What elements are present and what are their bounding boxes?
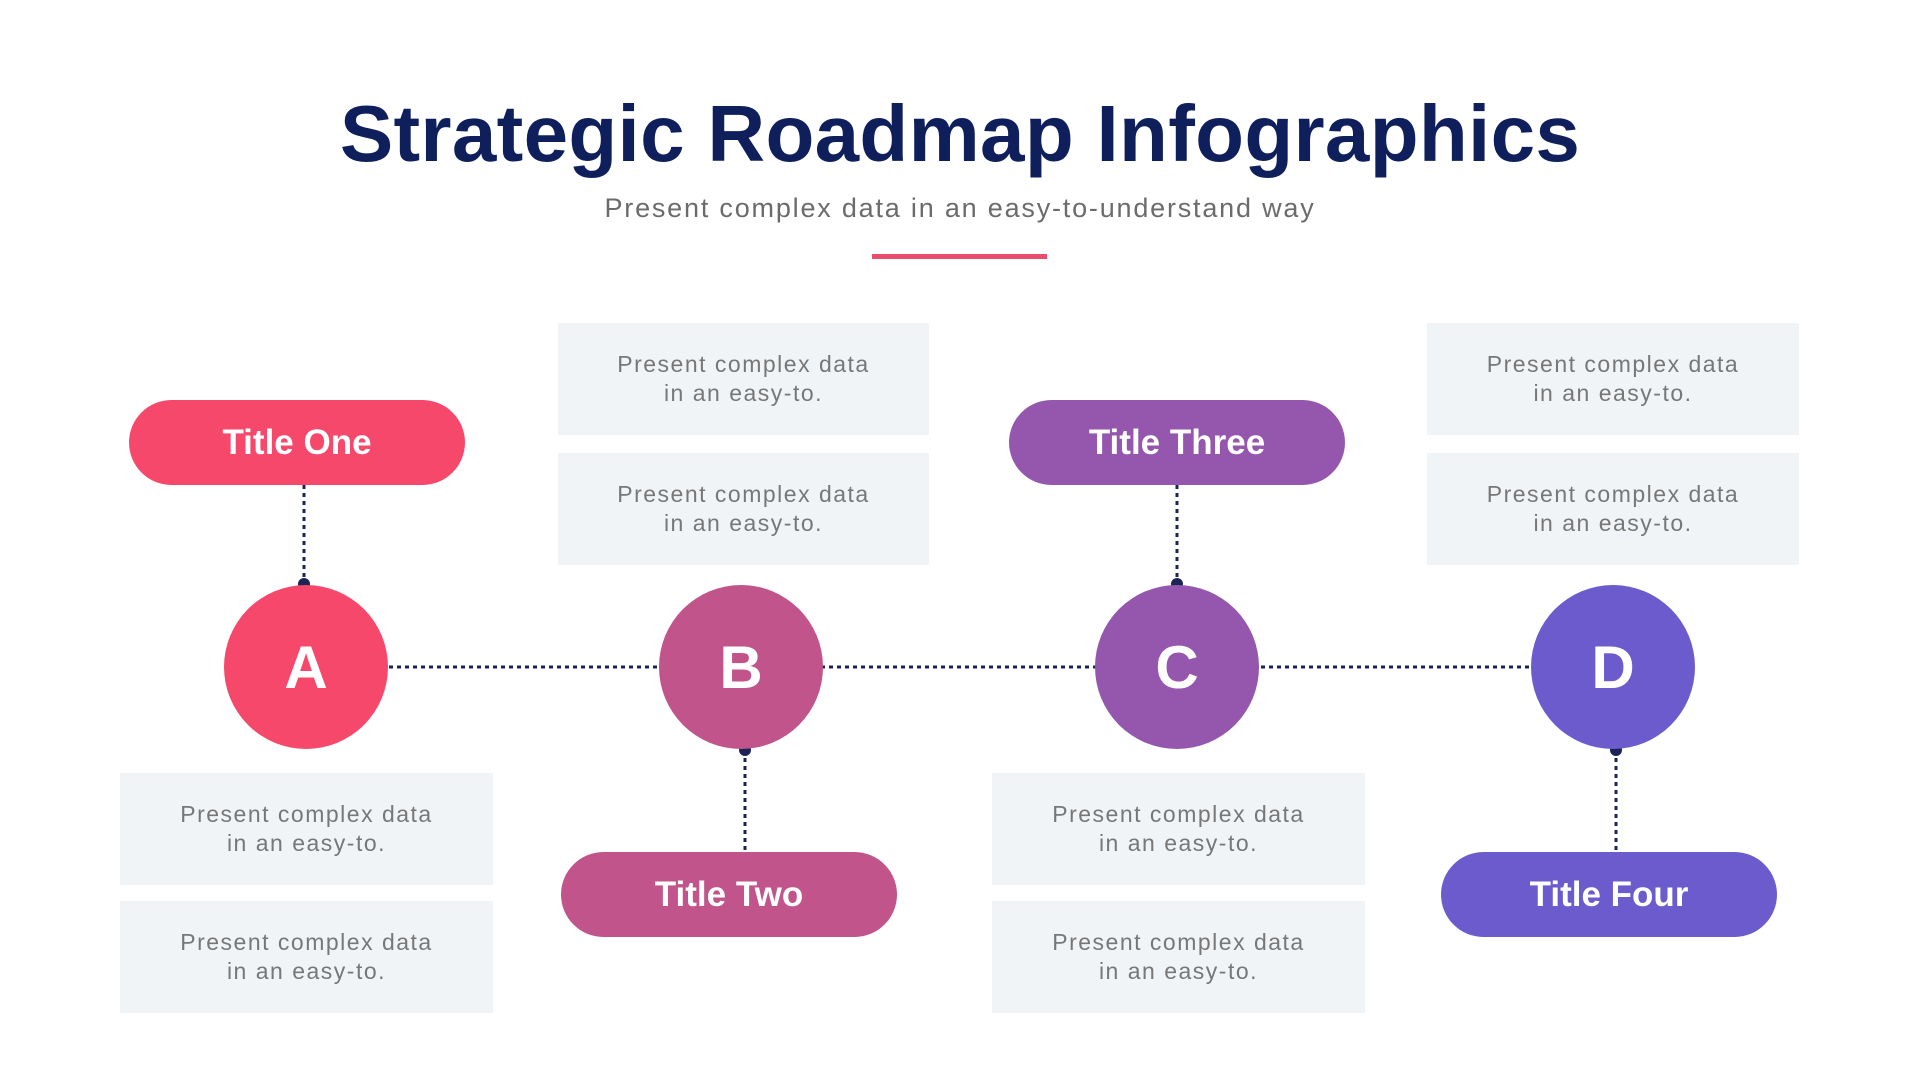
circle D: [1531, 585, 1695, 749]
text box A1: Present complex data: [180, 801, 433, 827]
text box A2: Present complex data: [180, 929, 433, 955]
text box C1: [992, 773, 1365, 885]
text box B1: in an easy-to.: [664, 380, 823, 406]
text box C1: Present complex data: [1052, 801, 1305, 827]
circle B: B: [719, 634, 763, 700]
pill: Title Two: Title Two: [655, 874, 803, 914]
pill: Title One: Title One: [222, 422, 372, 462]
subtitle: Present complex data in an easy-to-understand way: [604, 193, 1316, 223]
text box D1: in an easy-to.: [1533, 380, 1693, 406]
text box C2: [992, 901, 1365, 1013]
text box B1: Present complex data: [617, 351, 870, 377]
title: Strategic Roadmap Infographics: [340, 89, 1580, 178]
text box D2: [1427, 453, 1799, 565]
circle D: D: [1591, 634, 1635, 700]
pill: Title Three: [1009, 400, 1345, 485]
text box A1: [120, 773, 493, 885]
pill: Title Four: [1441, 852, 1777, 937]
pill: Title Two: [561, 852, 897, 937]
pill: Title Four: Title Four: [1530, 874, 1688, 914]
circle A: A: [284, 634, 328, 700]
text box B2: [558, 453, 929, 565]
text box B2: Present complex data: [617, 481, 870, 507]
text box C1: in an easy-to.: [1099, 830, 1258, 856]
circle A: [224, 585, 388, 749]
text box C2: in an easy-to.: [1099, 958, 1258, 984]
pill: Title Three: Title Three: [1089, 422, 1265, 462]
text box A2: in an easy-to.: [227, 958, 386, 984]
text box B2: in an easy-to.: [664, 510, 823, 536]
text box D2: Present complex data: [1487, 481, 1739, 507]
pill: Title One: [129, 400, 465, 485]
text box D2: in an easy-to.: [1533, 510, 1693, 536]
text box A2: [120, 901, 493, 1013]
circle C: C: [1155, 634, 1199, 700]
text box D1: [1427, 323, 1799, 435]
text box C2: Present complex data: [1052, 929, 1305, 955]
text box D1: Present complex data: [1487, 351, 1739, 377]
accent underline: [872, 254, 1047, 259]
circle B: [659, 585, 823, 749]
circle C: [1095, 585, 1259, 749]
text box A1: in an easy-to.: [227, 830, 386, 856]
text box B1: [558, 323, 929, 435]
